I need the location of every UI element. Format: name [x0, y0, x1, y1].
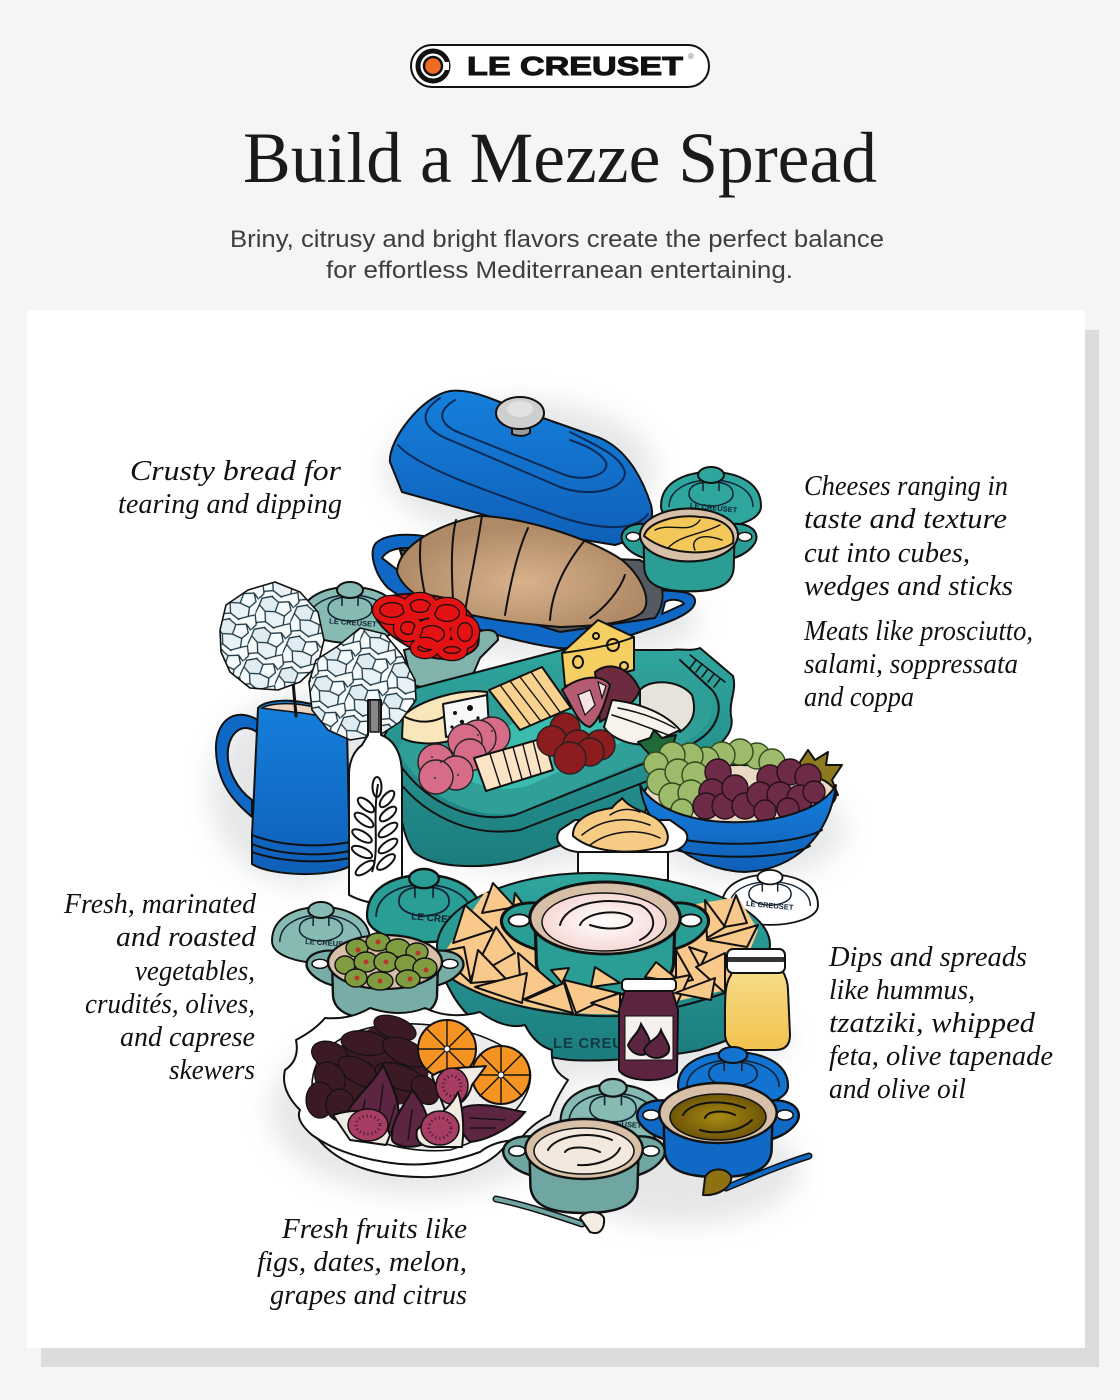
annotation: dips: [828, 941, 1053, 1105]
illustration: sage lid beside olives: LE CREUSET: [305, 937, 353, 949]
annotation: dips: and olive oil: [829, 1073, 966, 1105]
subtitle: [230, 226, 884, 284]
dark red soppressata slices: [537, 713, 615, 774]
cream cheese wheel and blue cheese: [402, 691, 489, 743]
illustration: sage lid beside olives: [272, 902, 370, 963]
annotation: cheeses: [804, 470, 1013, 602]
fig halves: [333, 1066, 486, 1147]
swiss cheese wedge: [562, 620, 634, 686]
illustration: sage lid front: LE CREUSET: [594, 1118, 642, 1130]
illustration: small teal lid behind butter pot: LE CREUSET: [690, 501, 738, 515]
annotation: vegetables: [63, 888, 256, 1086]
annotation: vegetables: Fresh, marinated: [63, 888, 256, 920]
panel shadow: [41, 330, 1099, 1367]
annotation: meats: [803, 615, 1033, 713]
orange slices: [418, 1020, 530, 1104]
illustration: small teal lid behind butter pot: [661, 467, 761, 528]
annotation: vegetables: and caprese: [120, 1021, 255, 1053]
soft shadows under illustration: [210, 400, 845, 1225]
annotation: bread: Crusty bread for: [130, 455, 342, 487]
illustration: sage lid front: [560, 1079, 666, 1146]
orange cheese sticks: [489, 667, 571, 730]
annotation: vegetables: skewers: [169, 1054, 255, 1086]
tortilla chips behind dip pot: [453, 883, 758, 947]
red pepper rings: [372, 594, 479, 659]
prosciutto and coppa: [562, 666, 640, 727]
illustration: blue pitcher: [216, 701, 350, 874]
illustration: hydrangeas: [220, 582, 416, 740]
annotation: vegetables: and roasted: [116, 921, 256, 953]
pink salami slices: [418, 717, 510, 794]
illustration: grape bowl: [638, 730, 842, 872]
white cheese sticks: [474, 738, 553, 791]
grape leaves: [638, 730, 842, 800]
illustration: teal baking dish with cheeses and meats: [381, 620, 734, 866]
illustration: whipped feta in white pot: [557, 798, 687, 880]
illustration: blue lid: [678, 1047, 788, 1108]
right hydrangea: [309, 628, 416, 740]
illustration: olives pot: [307, 933, 463, 1020]
annotation: fruits: figs, dates, melon,: [257, 1246, 467, 1278]
loaf of bread: [397, 515, 646, 627]
annotation: cheeses: cut into cubes,: [804, 537, 970, 569]
illustration: pot of red peppers: [372, 594, 498, 688]
annotation: meats: and coppa: [804, 681, 914, 713]
illustration: olive oil pot: [637, 1083, 799, 1177]
illustration: fruit plate: [284, 1008, 568, 1177]
annotation: bread: [118, 455, 342, 520]
annotation: fruits: [257, 1213, 467, 1311]
annotation: cheeses: wedges and sticks: [804, 570, 1013, 602]
annotation: vegetables: crudités, olives,: [85, 988, 255, 1020]
illustration: big teal dish: [437, 873, 770, 1061]
tortilla chips front: [438, 927, 725, 1013]
subtitle: for effortless Mediterranean entertaining.: [326, 257, 793, 284]
annotation: bread: tearing and dipping: [118, 488, 342, 520]
illustration: honey jar: [725, 949, 790, 1050]
illustration: bread dish with loaf: [373, 515, 695, 648]
icon: figs on jar label: [628, 1024, 669, 1058]
panel: white card: [27, 310, 1085, 1348]
red grapes: [693, 759, 825, 822]
subtitle: Briny, citrusy and bright flavors create the perfect balance: [230, 226, 884, 253]
illustration: hydrangea stems: [292, 670, 318, 716]
illustration: sage spoon: [496, 1199, 604, 1233]
logo: Le Creuset: ®: [688, 52, 694, 61]
logo: Le Creuset: [411, 45, 709, 87]
green grapes: [644, 739, 785, 821]
annotation: fruits: Fresh fruits like: [281, 1213, 467, 1245]
illustration: tzatziki pot: [503, 1119, 665, 1213]
illustration: sage lid back left: [300, 582, 400, 643]
whole figs: [345, 1065, 525, 1147]
dip pot: [501, 882, 709, 995]
left hydrangea: [220, 582, 324, 690]
illustration: bread lid: [390, 391, 652, 545]
illustration: olive oil bottle: [349, 700, 402, 904]
annotation: cheeses: taste and texture: [804, 503, 1007, 535]
icon: lid knob: [496, 397, 544, 436]
annotation: vegetables: vegetables,: [135, 955, 255, 987]
illustration: big teal dish: LE CREU: [553, 1035, 623, 1052]
icon: olive branch: [350, 777, 400, 878]
annotation: dips: Dips and spreads: [828, 941, 1027, 973]
annotation: fruits: grapes and citrus: [270, 1279, 467, 1311]
logo: Le Creuset: LE CREUSET: [467, 51, 683, 81]
white mozzarella slices: [604, 682, 694, 745]
annotation: dips: tzatziki, whipped: [829, 1007, 1036, 1039]
annotation: cheeses: Cheeses ranging in: [804, 470, 1008, 502]
annotation: meats: salami, soppressata: [804, 648, 1018, 680]
illustration: white lid right: [722, 870, 818, 925]
illustration: teal lid behind big dish: [367, 869, 481, 942]
annotation: dips: feta, olive tapenade: [829, 1040, 1053, 1072]
illustration: blue spoon: [703, 1156, 809, 1195]
annotation: meats: Meats like prosciutto,: [803, 615, 1033, 647]
illustration: sage lid back left: LE CREUSET: [329, 617, 377, 629]
illustration: teal lid behind big dish: LE CREU: [411, 911, 455, 926]
illustration: butter pot: [622, 509, 756, 591]
title: Build a Mezze Spread: [243, 118, 877, 198]
illustration: white lid right: LE CREUSET: [746, 899, 794, 912]
annotation: dips: like hummus,: [829, 974, 975, 1006]
dates: [306, 1010, 444, 1121]
green olives: [335, 933, 437, 990]
illustration: fig jam jar: [619, 979, 678, 1080]
